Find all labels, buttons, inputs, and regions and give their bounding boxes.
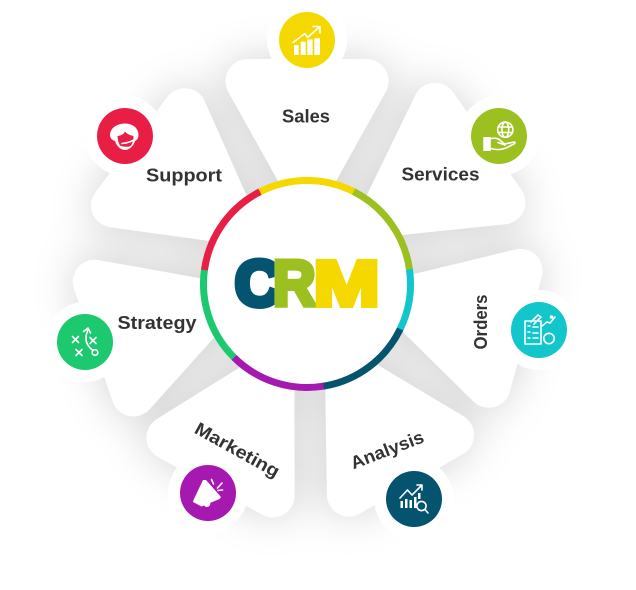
title: CRM logo: C	[235, 248, 281, 320]
title: CRM logo: R	[273, 248, 316, 320]
label: support: Support	[146, 166, 222, 186]
icon: globe in hand	[483, 122, 515, 151]
label: strategy: Strategy	[118, 313, 196, 333]
label: orders: Orders	[471, 294, 491, 350]
icon: analysis chart with magnifier	[400, 485, 428, 513]
title: CRM logo	[234, 258, 378, 309]
icon: strategy play	[72, 328, 98, 356]
icon: sales growth chart	[293, 26, 320, 55]
icon: support agent	[110, 124, 138, 150]
label: marketing: Marketing	[191, 418, 283, 481]
icon: order checklist	[525, 315, 555, 344]
panel: marketing	[168, 344, 325, 533]
panel: services	[347, 96, 539, 264]
label: analysis: Analysis	[348, 427, 427, 473]
panel: strategy	[45, 247, 235, 394]
CRM wheel infographic	[57, 12, 567, 528]
soft shadow behind panels	[82, 59, 532, 509]
panel: support	[85, 96, 270, 270]
label: sales: Sales	[282, 106, 330, 126]
center white disc	[203, 180, 411, 388]
label: services: Services	[402, 164, 480, 184]
title: CRM logo: M	[314, 249, 380, 320]
ring: colored segments	[161, 138, 453, 430]
panel: sales	[247, 0, 367, 188]
panel: analysis	[295, 342, 454, 539]
icon: megaphone	[193, 480, 222, 507]
panel: orders	[386, 242, 579, 386]
